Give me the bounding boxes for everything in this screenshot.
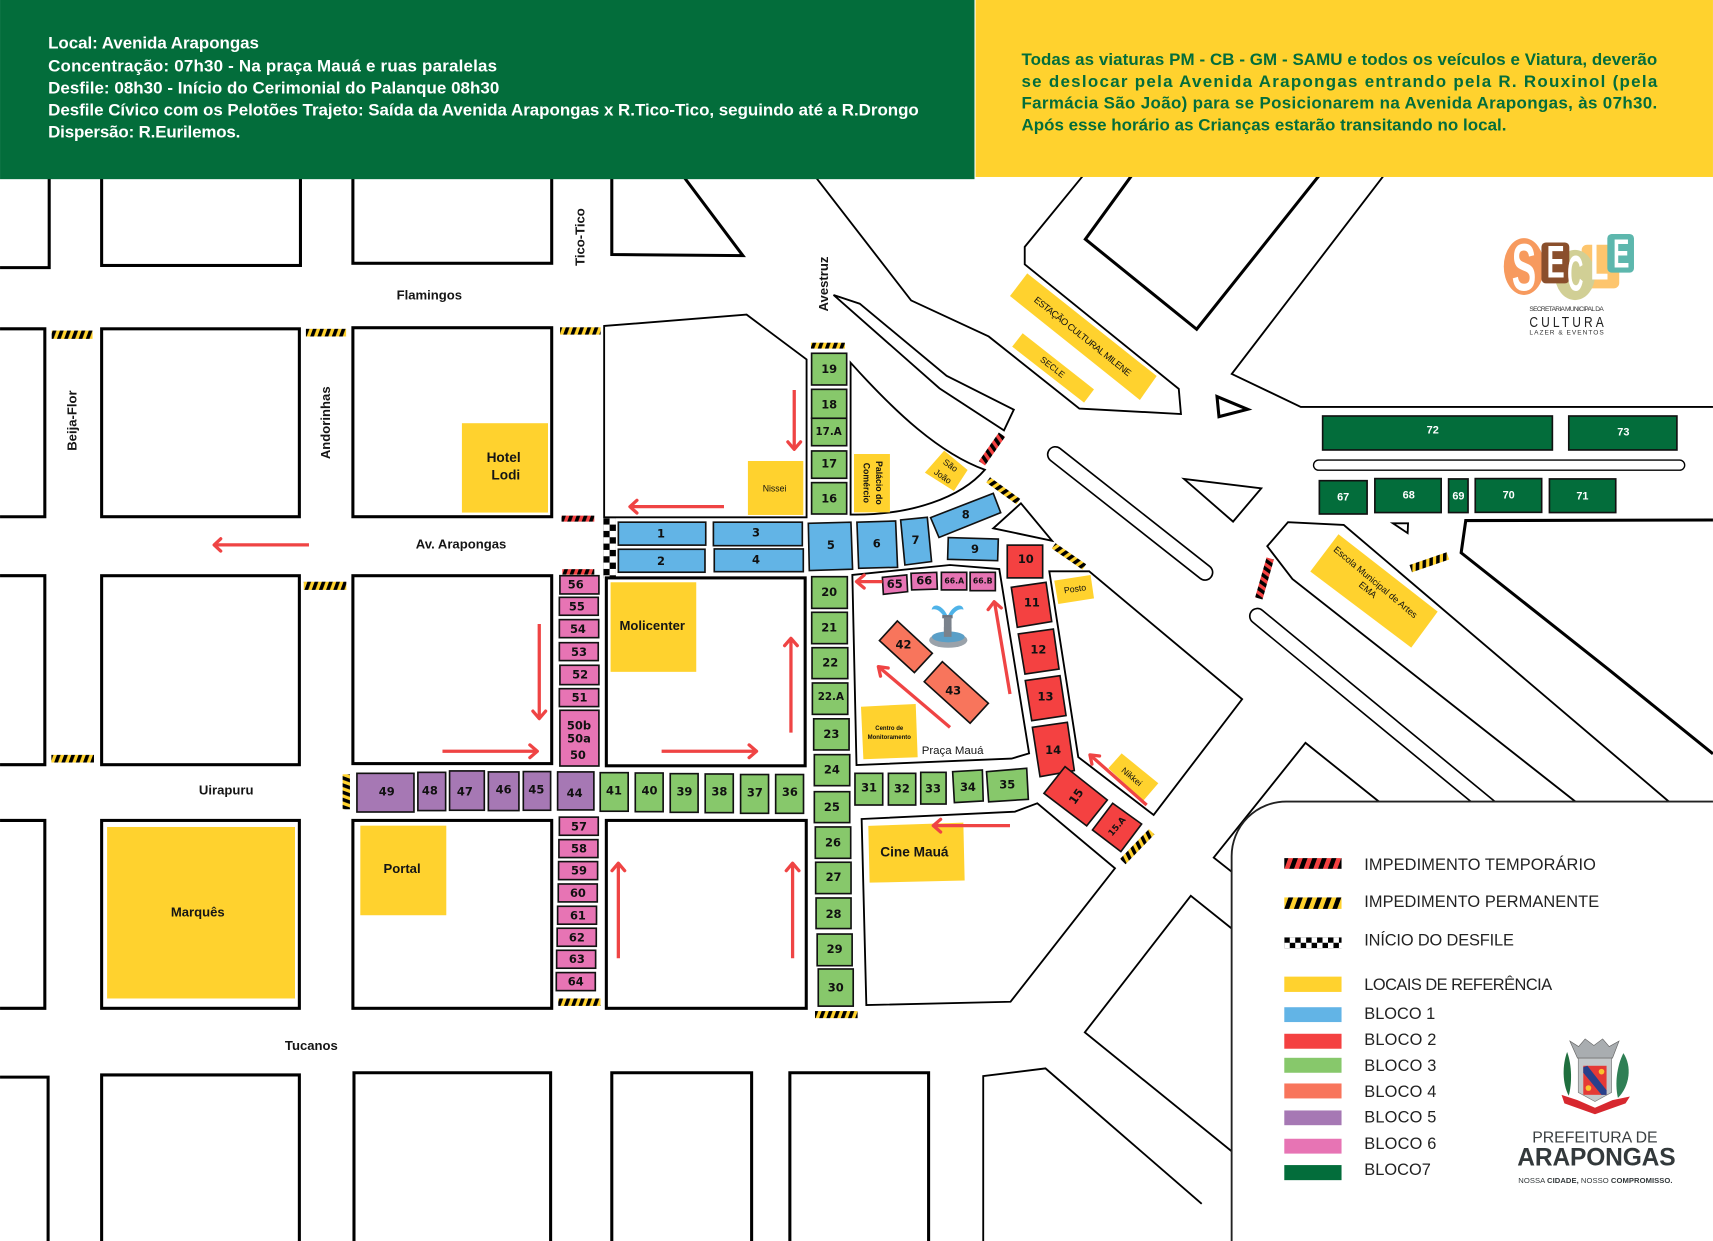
stall 37	[741, 775, 769, 813]
Nissei	[748, 461, 803, 515]
stall 32	[888, 773, 916, 805]
stall 9	[948, 538, 998, 561]
Marquês: Marquês	[171, 905, 225, 920]
stall 66.A: 66.A	[944, 576, 965, 586]
vehicle instructions text: Farmácia São João) para se Posicionarem na Avenida Arapongas, às 07h30.	[1021, 94, 1657, 113]
stall 48	[418, 772, 446, 811]
stall 2	[618, 549, 705, 572]
stall 31	[855, 773, 883, 805]
legend: bloco 2	[1284, 1031, 1436, 1049]
stall 54	[559, 620, 599, 638]
stall 1	[618, 522, 706, 545]
stalls 50b, 50a, 50: 50a	[567, 731, 591, 745]
stall 14	[1032, 722, 1074, 777]
stall 16	[812, 483, 847, 514]
stalls 50b, 50a, 50: 50	[570, 748, 586, 762]
stall 68: 68	[1403, 489, 1415, 501]
stall 39	[670, 774, 698, 812]
legend: bloco 6	[1284, 1135, 1436, 1154]
Molicenter	[611, 582, 696, 672]
stall 19: 19	[821, 362, 837, 376]
logo: SECLE Secretaria Municipal da Cultura: L	[1590, 233, 1608, 291]
stall 35: 35	[999, 777, 1015, 791]
stall 6	[857, 521, 898, 568]
stalls 50b, 50a, 50	[560, 710, 599, 766]
stall 3	[713, 522, 802, 546]
bloco 2 stalls	[1007, 545, 1142, 852]
arrow	[630, 500, 724, 513]
stall 27	[816, 862, 851, 894]
stall 38: 38	[711, 784, 727, 798]
vehicle instructions text: se deslocar pela Avenida Arapongas entrando pela R. Rouxinol (pela	[1021, 72, 1658, 91]
legend: bloco 4	[1284, 1083, 1436, 1101]
traffic island pills	[1055, 454, 1680, 808]
stall 49	[357, 773, 414, 812]
legend: início do desfile: INÍCIO DO DESFILE	[1364, 931, 1514, 950]
Marquês	[107, 827, 295, 998]
stall 8: 8	[962, 508, 970, 522]
stall 21	[812, 612, 847, 644]
stall 73: 73	[1617, 427, 1629, 439]
legend: bloco 3	[1284, 1057, 1436, 1075]
stall 38	[705, 774, 733, 813]
stall 68	[1375, 479, 1441, 513]
logo: Prefeitura de Arapongas	[1517, 1039, 1676, 1185]
bloco 6 stalls	[556, 572, 995, 991]
stall 65: 65	[887, 577, 903, 591]
legend: bloco 1: BLOCO 1	[1364, 1005, 1435, 1023]
legend: bloco 1	[1284, 1005, 1435, 1023]
stall 62	[557, 928, 596, 946]
stall 26	[815, 827, 851, 858]
stall 44	[558, 772, 594, 810]
temporary impediment barriers	[562, 432, 1274, 599]
stall 26: 26	[825, 835, 841, 849]
São João	[925, 451, 968, 491]
stall 73	[1569, 416, 1677, 450]
logo: SECLE Secretaria Municipal da Cultura: CULTURA	[1529, 314, 1604, 330]
street names: Praça Mauá	[922, 745, 984, 757]
Escola Municipal de Artes EMA	[1310, 534, 1438, 648]
stall 24	[814, 755, 850, 786]
Palácio do Comércio: Comércio	[861, 463, 871, 503]
logo: SECLE Secretaria Municipal da Cultura: E	[1547, 236, 1565, 287]
stalls 50b, 50a, 50: 50b	[567, 718, 591, 732]
logo: SECLE Secretaria Municipal da Cultura: C	[1567, 247, 1583, 302]
stall 47	[450, 771, 484, 810]
stall 57: 57	[571, 819, 587, 833]
stall 4	[714, 549, 803, 572]
stall 16: 16	[821, 492, 837, 506]
Centro de Monitoramento: Monitoramento	[868, 735, 911, 741]
street names: Avestruz	[816, 256, 831, 311]
logo: SECLE Secretaria Municipal da Cultura: E	[1613, 231, 1629, 277]
stall 15.A: 15.A	[1107, 815, 1129, 839]
event info text: Desfile: 08h30 - Início do Cerimonial do Palanque 08h30	[48, 78, 499, 97]
legend: bloco 2: BLOCO 2	[1364, 1031, 1436, 1049]
stall 36: 36	[782, 785, 798, 799]
stall 8	[931, 493, 1001, 537]
stall 58	[559, 840, 598, 858]
Escola Municipal de Artes EMA: EMA	[1357, 580, 1379, 601]
stall 7: 7	[911, 533, 919, 547]
stall 22.A	[812, 683, 848, 714]
stall 67: 67	[1337, 492, 1349, 504]
stall 46: 46	[496, 782, 512, 796]
event info text: Dispersão: R.Eurilemos.	[48, 123, 240, 142]
street names: Tucanos	[285, 1038, 338, 1053]
bloco 7 stalls	[1319, 416, 1677, 514]
arrow	[1090, 755, 1147, 805]
SECLE: SECLE	[1038, 354, 1067, 380]
stall 15.A	[1092, 803, 1142, 852]
stall 17: 17	[821, 457, 837, 471]
street names	[65, 208, 984, 1053]
arrow	[533, 624, 546, 719]
stall 20: 20	[821, 585, 837, 599]
stall 23	[814, 719, 849, 750]
logo: Prefeitura de Arapongas: NOSSA CIDADE, NOSSO COMPROMISSO.	[1518, 1176, 1673, 1185]
logo: SECLE Secretaria Municipal da Cultura	[1504, 231, 1634, 336]
stall 56	[560, 576, 599, 594]
bloco 3 stalls	[600, 353, 1028, 1006]
stall 52	[560, 665, 599, 685]
stall 6: 6	[873, 536, 881, 550]
stall 3: 3	[752, 526, 760, 540]
icon: fountain	[929, 606, 967, 648]
parade start checkered line	[603, 518, 616, 578]
stall 66	[911, 572, 937, 590]
São João: João	[932, 467, 954, 486]
stall 41: 41	[606, 783, 622, 797]
Nissei: Nissei	[763, 483, 786, 493]
legend: bloco 4: BLOCO 4	[1364, 1083, 1436, 1101]
Palácio do Comércio	[854, 454, 890, 512]
street names: Uirapuru	[199, 782, 253, 797]
stall 4: 4	[752, 552, 760, 566]
vehicle instructions text	[1021, 50, 1658, 135]
Portal	[360, 826, 446, 915]
bloco 4 stalls	[879, 621, 988, 723]
stall 24: 24	[824, 763, 840, 777]
event info text: Concentração: 07h30 - Na praça Mauá e ruas paralelas	[48, 57, 497, 76]
stall 61: 61	[570, 908, 586, 922]
stall 15	[1044, 767, 1107, 826]
permanent impediment barriers	[51, 327, 1449, 1018]
stall 15: 15	[1066, 786, 1086, 807]
bloco 5 stalls	[357, 771, 594, 812]
arrow	[785, 638, 797, 733]
street names: Tico-Tico	[573, 208, 588, 266]
legend: bloco 5: BLOCO 5	[1364, 1109, 1436, 1127]
stall 25	[814, 792, 850, 823]
stall 20	[812, 577, 847, 608]
arrow	[786, 863, 799, 958]
Molicenter: Molicenter	[619, 618, 685, 633]
Portal: Portal	[383, 861, 421, 876]
stall 22	[812, 648, 848, 679]
stall 64	[556, 973, 595, 991]
stall 60	[558, 884, 597, 902]
stall 30	[818, 969, 853, 1006]
stall 5	[808, 522, 853, 571]
legend: início do desfile	[1284, 931, 1514, 950]
stall 27: 27	[826, 870, 842, 884]
arrow	[856, 575, 882, 588]
stall 18: 18	[821, 398, 837, 412]
stall 65	[882, 575, 908, 594]
stall 52: 52	[572, 668, 588, 682]
stall 46	[488, 772, 519, 811]
Cine Mauá	[868, 823, 965, 883]
street names: Av. Arapongas	[416, 537, 506, 552]
stall 28	[816, 898, 851, 929]
stall 51: 51	[572, 691, 588, 705]
stall 49: 49	[379, 784, 395, 798]
Posto: Posto	[1063, 582, 1087, 595]
stall 66.B	[970, 572, 995, 591]
panel: header vehicle instructions	[976, 0, 1713, 177]
Estação Cultural Milene	[1010, 273, 1157, 400]
stall 1: 1	[657, 527, 665, 541]
Posto	[1054, 575, 1094, 604]
stall 31: 31	[861, 781, 877, 795]
legend: bloco 3: BLOCO 3	[1364, 1057, 1436, 1075]
stall 62: 62	[569, 930, 585, 944]
stall 67	[1319, 481, 1367, 514]
stall 54: 54	[570, 622, 586, 636]
stall 56: 56	[568, 577, 584, 591]
SECLE	[1012, 333, 1094, 403]
event info text: Desfile Cívico com os Pelotões Trajeto: Saída da Avenida Arapongas x R.Tico-Tico, seguindo até a R.Drongo	[48, 100, 919, 119]
stall 28: 28	[826, 907, 842, 921]
stall 58: 58	[571, 841, 587, 855]
Escola Municipal de Artes EMA: Escola Municipal de Artes	[1332, 544, 1420, 620]
logo: SECLE Secretaria Municipal da Cultura: S	[1512, 231, 1536, 305]
stall 22: 22	[822, 656, 838, 670]
arrow	[878, 667, 950, 727]
stall 29	[817, 934, 852, 966]
stall 57	[559, 817, 598, 835]
stall 60: 60	[570, 886, 586, 900]
stall 63: 63	[569, 952, 585, 966]
route arrows	[214, 390, 1147, 958]
Nikkei	[1108, 753, 1158, 801]
stall 17	[812, 451, 847, 478]
stall 25: 25	[824, 800, 840, 814]
stall 10: 10	[1018, 552, 1034, 566]
stall 48: 48	[422, 783, 438, 797]
legend: locais de referência: LOCAIS DE REFERÊNCIA	[1364, 975, 1552, 994]
stall 44: 44	[567, 786, 583, 800]
stall 66: 66	[916, 574, 932, 588]
arrow	[988, 602, 1010, 694]
arrow	[214, 539, 309, 551]
stall 69: 69	[1452, 491, 1464, 503]
panel: header event info	[0, 0, 974, 179]
stall 71: 71	[1576, 491, 1588, 503]
stall 13	[1025, 676, 1066, 721]
arrow	[788, 390, 801, 449]
stall 43: 43	[945, 683, 961, 697]
street names: Andorinhas	[318, 386, 333, 459]
stall 66.A	[941, 572, 967, 590]
stall 19	[812, 353, 847, 385]
stall 70	[1475, 479, 1542, 512]
vehicle instructions text: Todas as viaturas PM - CB - GM - SAMU e todos os veículos e Viatura, deverão	[1021, 50, 1657, 69]
stall 61	[558, 906, 597, 924]
stall 10	[1007, 545, 1043, 578]
stall 7	[901, 517, 932, 565]
stall 63	[557, 950, 596, 968]
stall 70: 70	[1503, 489, 1515, 501]
arrow	[612, 863, 625, 958]
legend: bloco 6: BLOCO 6	[1364, 1135, 1436, 1153]
event info text: Local: Avenida Arapongas	[48, 34, 259, 53]
stall 36	[776, 775, 804, 813]
stall 30: 30	[828, 981, 844, 995]
stall 66.B: 66.B	[973, 576, 993, 586]
stall 23: 23	[823, 727, 839, 741]
stall 40: 40	[642, 783, 657, 797]
stall 59	[559, 862, 598, 880]
reference places in yellow	[107, 273, 1438, 998]
icon: coat of arms	[1562, 1039, 1630, 1114]
stall 33: 33	[925, 782, 941, 796]
legend: bloco 7: BLOCO7	[1364, 1161, 1431, 1179]
legend: bloco 5	[1284, 1109, 1436, 1127]
stall 12	[1018, 629, 1059, 674]
stall 11: 11	[1024, 595, 1040, 609]
stall 42: 42	[895, 638, 911, 652]
stall 71	[1549, 479, 1616, 513]
Hotel Lodi: Lodi	[491, 468, 520, 483]
stall 53	[559, 643, 598, 661]
arrow	[442, 745, 537, 758]
stall 41	[600, 773, 628, 811]
legend: impedimento permanente: IMPEDIMENTO PERMANENTE	[1364, 893, 1599, 911]
stall 72	[1323, 416, 1552, 450]
Palácio do Comércio: Palácio do	[874, 461, 884, 505]
stall 64: 64	[568, 975, 584, 989]
São João: São	[941, 457, 960, 474]
stall 21: 21	[821, 621, 837, 635]
Hotel Lodi: Hotel	[487, 450, 521, 465]
Nikkei: Nikkei	[1119, 765, 1144, 788]
stall 22.A: 22.A	[818, 691, 844, 703]
stall 55: 55	[569, 599, 585, 613]
legend: impedimento temporário: IMPEDIMENTO TEMPORÁRIO	[1364, 855, 1596, 874]
legend: bloco 7	[1284, 1161, 1431, 1180]
stall 14: 14	[1045, 743, 1061, 757]
Centro de Monitoramento	[861, 704, 918, 759]
bloco 1 stalls	[618, 493, 1001, 572]
stall 12: 12	[1030, 642, 1046, 656]
stall 55	[559, 597, 598, 615]
stall 40	[635, 773, 663, 812]
stall 39: 39	[676, 784, 692, 798]
Estação Cultural Milene: ESTAÇÃO CULTURAL MILENE	[1032, 295, 1133, 378]
panel: legend	[1232, 802, 1713, 1241]
stall 47: 47	[457, 784, 473, 798]
stall 11	[1011, 582, 1052, 627]
event info text	[48, 34, 919, 142]
stall 9: 9	[971, 542, 979, 556]
arrow	[662, 745, 757, 758]
stall 35	[986, 768, 1028, 802]
logo: Prefeitura de Arapongas: PREFEITURA DE	[1532, 1130, 1658, 1147]
stall 37: 37	[747, 786, 763, 800]
stall 34: 34	[960, 780, 976, 794]
stall 17.A: 17.A	[816, 426, 842, 438]
stall 45: 45	[528, 782, 544, 796]
stall 29: 29	[827, 942, 843, 956]
stall 59: 59	[571, 864, 587, 878]
stall 45	[523, 772, 551, 810]
stall 69	[1449, 479, 1468, 513]
stall 13: 13	[1038, 689, 1053, 703]
logo: SECLE Secretaria Municipal da Cultura: SECRETARIA MUNICIPAL DA	[1529, 306, 1604, 313]
street names: Beija-Flor	[65, 390, 80, 451]
stall 33	[921, 772, 946, 804]
vehicle instructions text: Após esse horário as Crianças estarão transitando no local.	[1021, 116, 1506, 135]
stall 34	[953, 770, 983, 803]
stall 32: 32	[894, 782, 910, 796]
stall 2: 2	[657, 554, 665, 568]
Centro de Monitoramento: Centro de	[875, 726, 904, 732]
stall 72: 72	[1427, 424, 1439, 436]
legend: locais de referência	[1284, 975, 1552, 994]
stall 51	[559, 689, 599, 707]
stall 18	[812, 389, 847, 418]
logo: Prefeitura de Arapongas: ARAPONGAS	[1517, 1145, 1676, 1172]
Cine Mauá: Cine Mauá	[880, 845, 949, 860]
stall 53: 53	[571, 645, 587, 659]
logo: SECLE Secretaria Municipal da Cultura: LAZER & EVENTOS	[1529, 329, 1604, 336]
stall 17.A	[812, 418, 847, 446]
street names: Flamingos	[397, 287, 462, 302]
Hotel Lodi	[462, 423, 548, 513]
arrow	[933, 819, 1010, 832]
stall 5: 5	[827, 538, 835, 552]
